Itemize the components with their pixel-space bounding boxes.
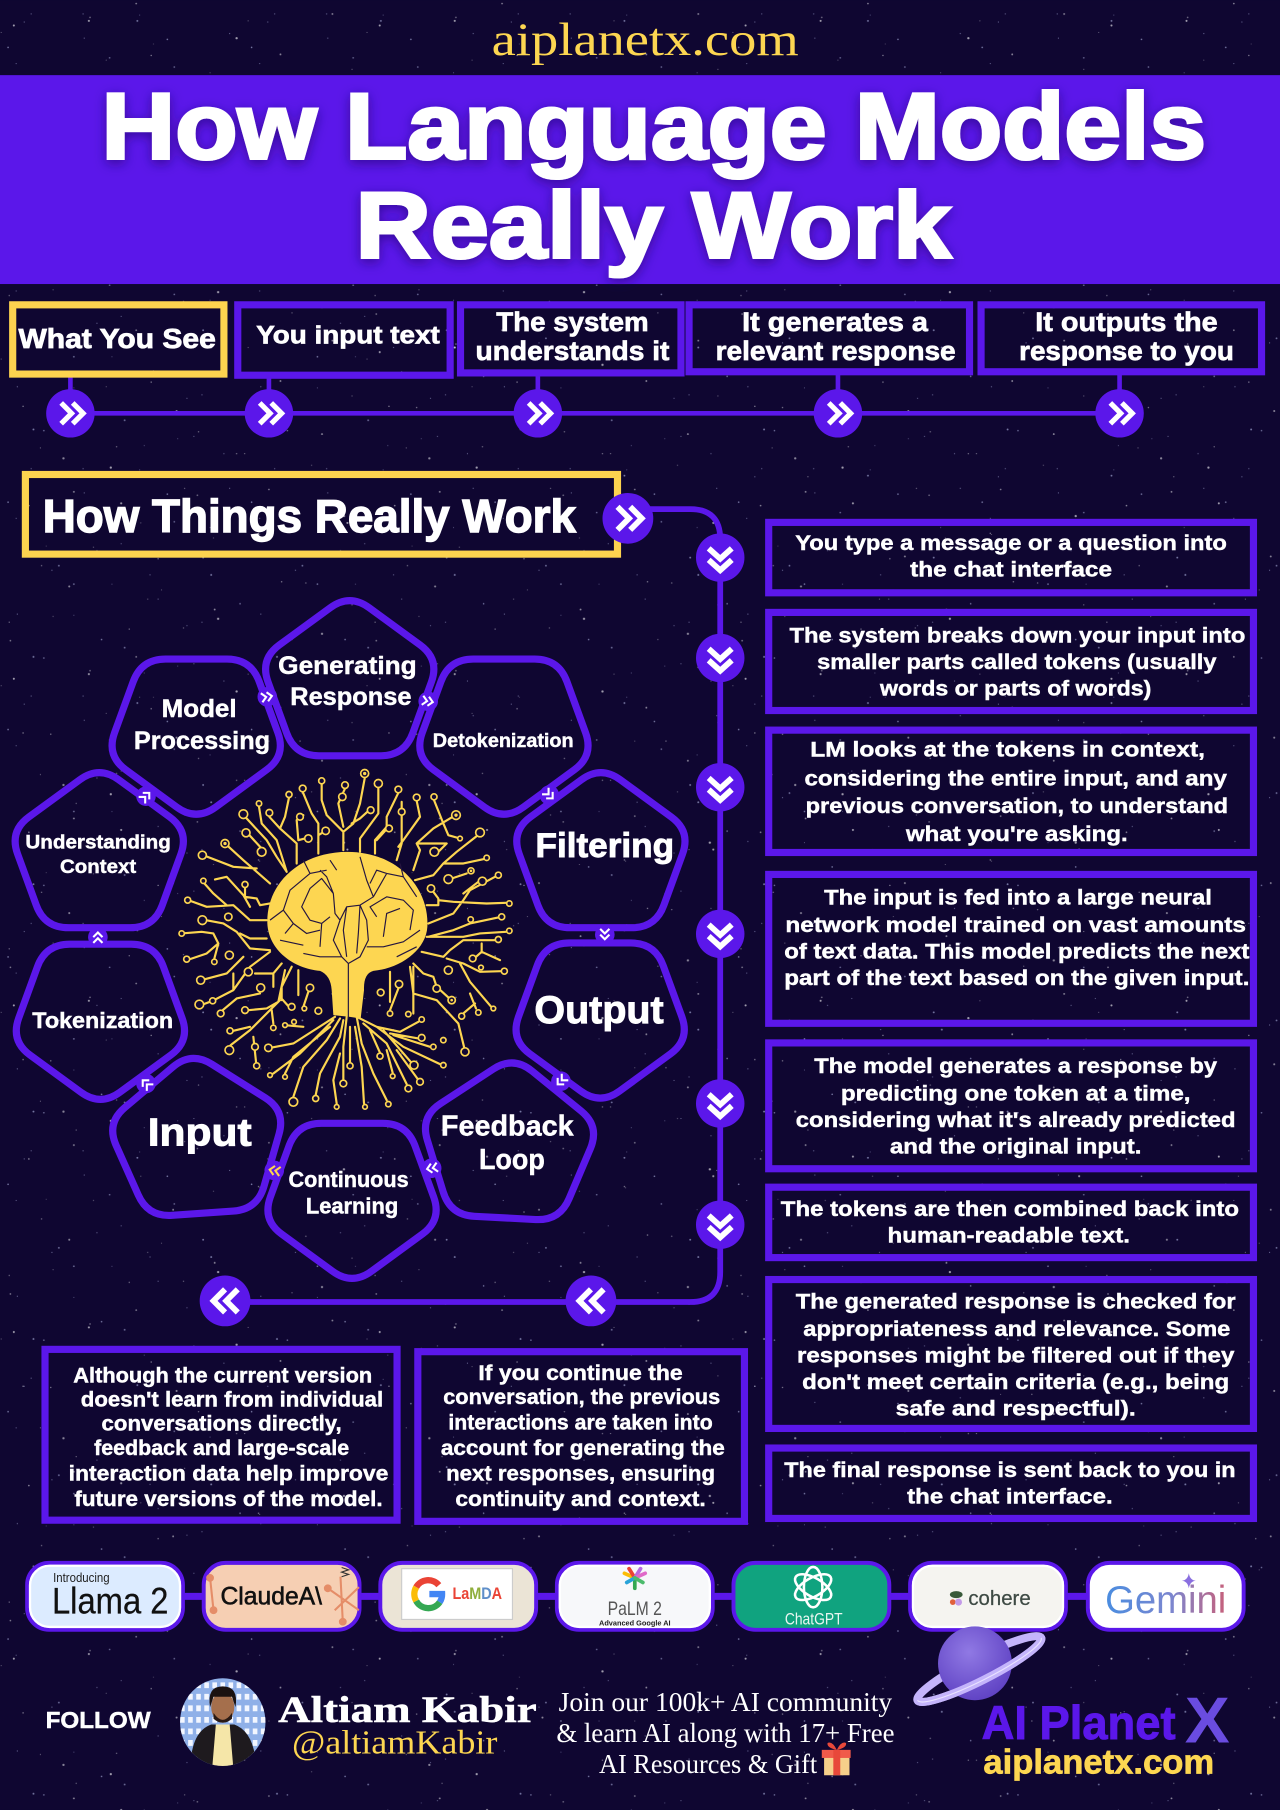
logo: gemini (1088, 1563, 1244, 1630)
title banner: How Language Models (102, 73, 1206, 178)
pentagon: feedback loop: Loop (479, 1144, 545, 1176)
brand logo: ai planet x: aiplanetx.com (983, 1744, 1214, 1782)
step: you input text: You input text (256, 322, 440, 349)
explanation: model processing: The input is fed into a large neural (824, 884, 1212, 909)
explanation: continuous learning: continuity and context. (455, 1486, 706, 1511)
icon: ringed planet (912, 1626, 1046, 1711)
explanation: continuous learning (418, 1352, 744, 1521)
explanation: feedback loop: future versions of the model. (74, 1486, 383, 1511)
explanation: output: the chat interface. (907, 1483, 1113, 1508)
avatar portrait (180, 1678, 265, 1766)
community invitation text: Join our 100k+ AI community (559, 1686, 892, 1717)
explanation: detokenization (769, 1187, 1253, 1258)
logo: lamda: LaMDA (452, 1585, 502, 1603)
pentagon: feedback loop (421, 1059, 597, 1222)
pentagon: filtering (517, 773, 685, 928)
community invitation text: & learn AI along with 17+ Free (556, 1717, 894, 1748)
pentagon: input: Input (148, 1110, 252, 1154)
explanation: output (769, 1448, 1253, 1518)
explanation: feedback loop: Although the current version (73, 1362, 372, 1387)
explanation: generating response: and the original input. (890, 1134, 1141, 1159)
explanation: continuous learning: conversation, the previous (443, 1384, 720, 1409)
logo: llama 2 (27, 1563, 183, 1630)
title banner (0, 73, 1280, 284)
circuit branches and roots (182, 778, 506, 1103)
explanation: detokenization: human-readable text. (888, 1223, 1130, 1248)
explanation: tokenization: smaller parts called tokens (usually (817, 649, 1217, 674)
pentagon: generating response (266, 601, 434, 756)
explanation: feedback loop: conversations directly, (102, 1411, 342, 1436)
explanation: input (769, 522, 1253, 593)
brand logo: ai planet x: AI Planet (982, 1697, 1176, 1750)
explanation: filtering: The generated response is checked for (796, 1288, 1236, 1313)
step: outputs response: response to you (1019, 336, 1234, 366)
explanation: model processing: network model trained on vast amounts (785, 912, 1246, 937)
explanation: continuous learning: account for generating the (441, 1435, 725, 1460)
explanation: filtering: safe and respectful). (896, 1396, 1136, 1421)
vertical flow line with arrows (200, 493, 744, 1326)
explanation: generating response: considering what it's already predicted (796, 1107, 1236, 1132)
explanation: continuous learning: interactions are taken into (448, 1410, 713, 1435)
explanation: context: what you're asking. (905, 821, 1128, 846)
explanation: tokenization: The system breaks down your input into (789, 622, 1245, 647)
pentagon: model processing: Processing (134, 727, 270, 755)
step: generates response (689, 305, 970, 372)
logo: palm 2: PaLM 2 (608, 1598, 662, 1620)
pentagon cycle diagram (15, 601, 685, 1278)
explanation: feedback loop: interaction data help improve (69, 1460, 388, 1485)
step: outputs response: It outputs the (1035, 307, 1218, 337)
section heading: how things really work: How Things Really Work (43, 490, 576, 542)
explanation: input: You type a message or a question into (795, 530, 1227, 555)
icon: circuit brain tree (179, 769, 512, 1109)
step: system understands (461, 305, 681, 373)
pentagon: continuous learning (268, 1123, 436, 1278)
explanation: input: the chat interface (910, 557, 1112, 582)
what you see timeline (13, 305, 1262, 438)
brand logo: ai planet x: X (1185, 1683, 1230, 1756)
pentagon: output (516, 943, 684, 1098)
explanation: feedback loop: doesn't learn from individual (81, 1386, 383, 1411)
logo: chatgpt: ChatGPT (785, 1609, 843, 1628)
explanation: feedback loop (45, 1349, 397, 1520)
explanation: context: considering the entire input, and any (804, 766, 1227, 791)
logo: claude ai: ClaudeA\ (220, 1582, 323, 1610)
pentagon: continuous learning: Continuous (289, 1167, 409, 1192)
pentagon: filtering: Filtering (536, 827, 674, 865)
pentagon: feedback loop: Feedback (441, 1111, 575, 1143)
brain and trunk (267, 852, 427, 1018)
pentagon: tokenization: Tokenization (32, 1008, 173, 1033)
step: you input text (238, 305, 450, 375)
explanation: filtering: responses might be filtered out if they (797, 1343, 1234, 1368)
brand logo: ai planet x (982, 1683, 1230, 1782)
top website url: aiplanetx.com (492, 14, 799, 65)
pentagon: input (108, 1053, 287, 1219)
explanation: continuous learning: If you continue the (478, 1360, 683, 1385)
explanation: output: The final response is sent back to you in (784, 1457, 1236, 1482)
logo: cohere: cohere (968, 1587, 1031, 1610)
community invitation text: AI Resources & Gift (599, 1748, 817, 1779)
step: what you see (13, 305, 224, 374)
pentagon: model processing: Model (162, 695, 237, 723)
cycle connector arrows (88, 685, 615, 1182)
pentagon: output: Output (534, 988, 664, 1032)
step: generates response: It generates a (742, 307, 928, 337)
explanation: context (769, 730, 1253, 852)
logo: claude ai (204, 1563, 360, 1630)
explanation: generating response: The model generates a response by (814, 1053, 1217, 1078)
explanation: filtering: don't meet certain criteria (e.g., being (802, 1369, 1229, 1394)
icon: gift (822, 1742, 851, 1775)
logo: chatgpt (733, 1563, 889, 1630)
logo: llama 2: Introducing (53, 1571, 110, 1585)
explanation: tokenization (769, 612, 1253, 711)
logo: palm 2: Advanced Google AI (599, 1618, 671, 1627)
step: outputs response (981, 305, 1262, 372)
model logo row (27, 1563, 1244, 1630)
pentagon: understanding context: Understanding (25, 832, 171, 854)
step: generates response: relevant response (716, 336, 956, 366)
step: system understands: understands it (476, 336, 670, 366)
pentagon: understanding context (15, 773, 183, 928)
explanation: generating response: predicting one token at a time, (841, 1081, 1191, 1106)
pentagon: detokenization: Detokenization (433, 730, 574, 752)
explanation: model processing: of text data. This model predicts the next (784, 939, 1249, 964)
author name: Altiam Kabir (278, 1689, 537, 1730)
pentagon: model processing (112, 659, 280, 814)
explanation: context: LM looks at the tokens in context, (810, 737, 1205, 762)
explanation: filtering (769, 1280, 1253, 1428)
explanation: continuous learning: next responses, ensuring (446, 1460, 715, 1485)
step: what you see: What You See (18, 323, 216, 354)
explanation: feedback loop: feedback and large-scale (94, 1435, 349, 1460)
explanation: detokenization: The tokens are then combined back into (781, 1196, 1239, 1221)
explanation: filtering: appropriateness and relevance. Some (803, 1316, 1230, 1341)
explanation: model processing: part of the text based on the given input. (784, 965, 1249, 990)
section heading: how things really work (25, 474, 617, 554)
follow label: FOLLOW (46, 1707, 151, 1733)
pentagon: tokenization (16, 944, 185, 1099)
author handle: @altiamKabir (292, 1724, 497, 1761)
step: system understands: The system (496, 307, 649, 337)
title banner: Really Work (355, 173, 952, 278)
logo: gemini: Gemini (1105, 1578, 1226, 1622)
pentagon: generating response: Response (290, 683, 411, 711)
logo: llama 2: Llama 2 (52, 1580, 169, 1621)
pentagon: understanding context: Context (60, 856, 137, 878)
explanation: context: previous conversation, to understand (806, 793, 1228, 818)
brain creases (270, 857, 420, 1018)
logo: lamda (380, 1563, 536, 1630)
timeline nodes (46, 389, 1144, 438)
logo: palm 2 (557, 1563, 713, 1630)
logo: cohere (910, 1563, 1066, 1630)
explanation: generating response (769, 1043, 1253, 1169)
pentagon: continuous learning: Learning (306, 1194, 398, 1219)
pentagon: detokenization (420, 659, 588, 814)
explanation: model processing (769, 874, 1253, 1023)
explanation: tokenization: words or parts of words) (879, 676, 1151, 701)
pentagon: generating response: Generating (278, 652, 417, 680)
community invitation text (556, 1686, 894, 1779)
circuit node tips (179, 769, 512, 1109)
